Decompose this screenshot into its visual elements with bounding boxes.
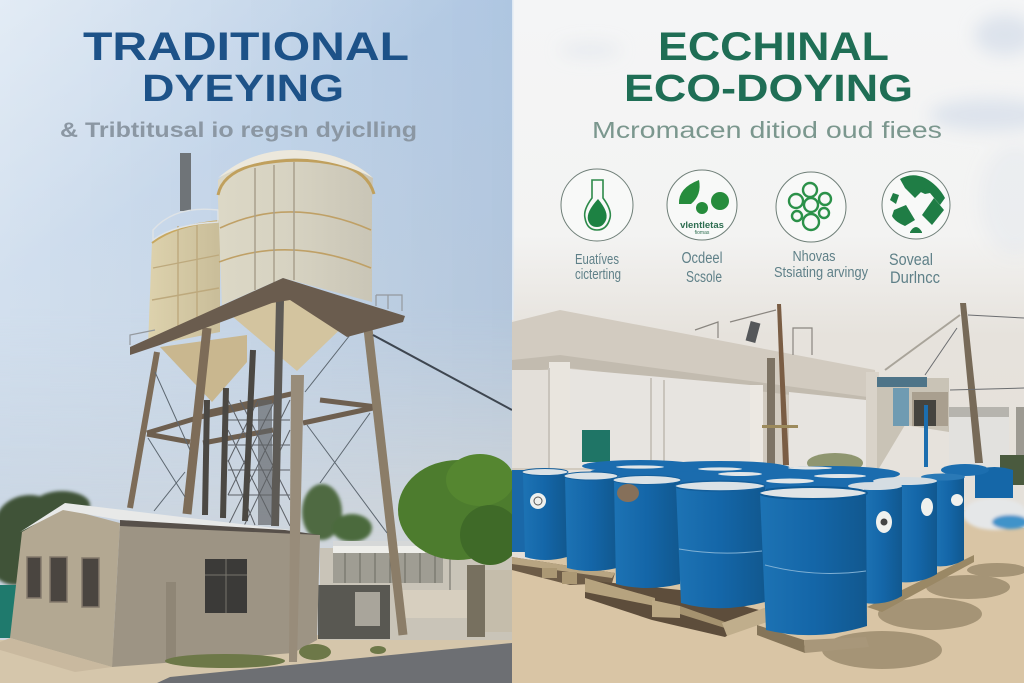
utility poles <box>762 303 983 466</box>
icon: leaf and pellets: fiomas <box>695 230 710 236</box>
icon caption 3 <box>774 249 869 281</box>
green fence <box>0 585 16 638</box>
blue tarp bin <box>975 467 1013 498</box>
icon: flask <box>561 169 633 241</box>
lattice scaffold <box>228 400 290 526</box>
right tree <box>398 454 520 637</box>
cross braces <box>147 392 377 443</box>
icon: leaf and pellets: vlentletas <box>680 220 724 231</box>
icon caption 2: Scsole <box>686 269 722 286</box>
sky tint <box>0 0 512 470</box>
concrete pole <box>289 375 304 662</box>
left panel <box>512 370 549 468</box>
background trees <box>0 484 372 585</box>
barrel 9 <box>921 474 965 566</box>
barrel 4 <box>564 472 618 571</box>
barrel row right <box>848 474 965 604</box>
icon caption 4: Soveal <box>889 251 933 269</box>
ground <box>0 635 512 683</box>
icon caption 1: Euatíves <box>575 252 619 268</box>
front window <box>205 559 247 613</box>
barrel 5 <box>522 468 568 560</box>
icon caption 1 <box>575 252 621 283</box>
roof fixtures <box>695 310 812 355</box>
right panel <box>789 392 866 470</box>
clouds <box>560 15 1024 255</box>
building front wall <box>112 523 320 667</box>
far building <box>949 407 1024 485</box>
plastic sacks <box>963 498 1024 530</box>
pillar left <box>549 362 570 468</box>
divider <box>512 0 514 320</box>
barrel 8 <box>873 477 937 582</box>
barrel 2 <box>675 481 765 608</box>
sky <box>512 0 1024 560</box>
tower frame <box>130 278 405 635</box>
title: traditional dyeing: DYEYING <box>142 68 344 110</box>
upper wall <box>512 310 879 470</box>
platform railing <box>130 295 402 345</box>
rear legs <box>205 300 280 526</box>
subtitle: traditional: & Tribtitusal io regsn dyiclling <box>60 119 417 142</box>
right pallet <box>757 625 805 653</box>
roof <box>20 503 290 532</box>
chimney <box>180 153 191 211</box>
pillar middle <box>750 385 763 468</box>
icon caption 3: Nhovas <box>792 249 836 265</box>
platform <box>130 278 405 355</box>
factory building <box>512 310 879 472</box>
icon caption 1: cicterting <box>575 267 621 283</box>
front tank <box>218 150 374 305</box>
scaffold panel <box>258 400 272 525</box>
building side wall <box>10 508 120 667</box>
barrel 3 <box>613 476 681 588</box>
icon: recycling shapes <box>882 171 950 239</box>
panel seams <box>549 368 664 468</box>
title: eco-dyeing <box>624 25 913 110</box>
front cone <box>234 300 338 371</box>
panel: traditional dyeing <box>0 0 520 683</box>
icon caption 2: Ocdeel <box>682 250 722 267</box>
left pallet <box>512 557 615 585</box>
icon caption 2 <box>682 250 722 286</box>
barrel shadows <box>822 563 1024 669</box>
icon: leaf and pellets <box>667 170 737 240</box>
annex structure <box>877 377 949 470</box>
barrel 7 <box>848 482 902 604</box>
back cone <box>160 335 247 402</box>
title: traditional dyeing: TRADITIONAL <box>83 25 409 69</box>
barrel 1 front <box>759 487 867 635</box>
title: eco-dyeing: ECO-DOYING <box>624 68 913 110</box>
shrubs <box>807 453 863 473</box>
back tank <box>148 209 220 346</box>
right end wall <box>866 372 879 472</box>
side windows <box>27 557 99 607</box>
ground <box>512 500 1024 683</box>
wall ledge <box>512 355 875 404</box>
icon caption 3: Stsiating arvingy <box>774 265 869 281</box>
barrel row left <box>512 468 765 608</box>
roof shadow <box>120 520 320 535</box>
wooden post <box>166 582 176 662</box>
stone building <box>10 503 320 667</box>
pallets <box>512 555 974 653</box>
guy wires <box>148 335 387 533</box>
green door <box>582 430 610 462</box>
power lines <box>885 315 1024 390</box>
middle pallet dark gap <box>585 580 767 637</box>
sky <box>0 0 512 683</box>
central panel <box>570 369 750 468</box>
panel: eco-dyeing <box>512 0 1024 683</box>
barrel back row highlights <box>616 465 866 484</box>
weeds <box>165 644 386 668</box>
power line <box>373 335 512 410</box>
barrel back rows <box>582 460 900 490</box>
road <box>157 643 512 683</box>
icon: cell cluster <box>776 172 846 242</box>
icon caption 4 <box>889 251 940 287</box>
front legs <box>130 320 403 635</box>
background building and fencing <box>318 541 512 640</box>
tarp pile <box>941 464 989 476</box>
icon caption 4: Durlncc <box>890 269 940 287</box>
concrete apron <box>0 638 112 672</box>
subtitle: eco: Mcromacen ditiod oud fiees <box>592 117 942 143</box>
title: traditional dyeing <box>84 32 408 102</box>
title: eco-dyeing: ECCHINAL <box>658 25 889 69</box>
